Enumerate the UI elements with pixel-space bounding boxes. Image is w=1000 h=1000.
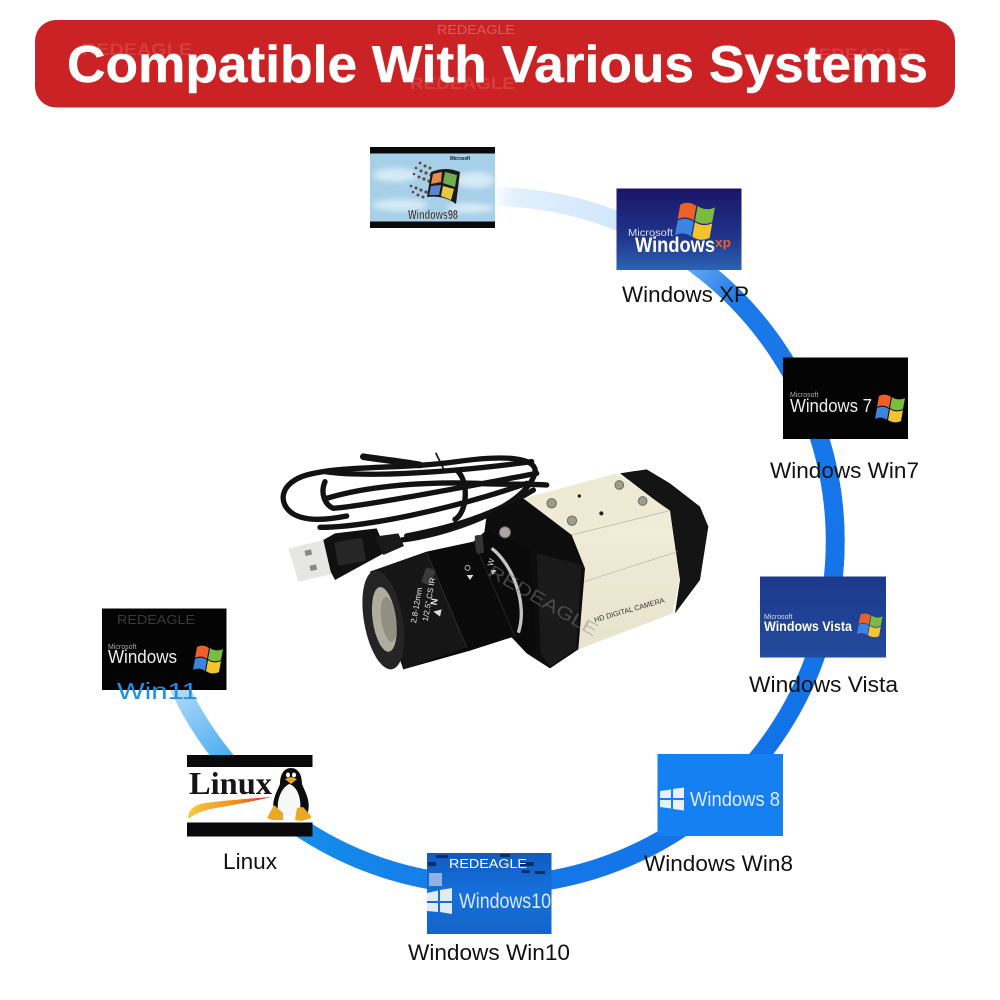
logo: Windows 7: [783, 358, 908, 439]
logo: Windows 98: [370, 147, 495, 228]
title banner: REDEAGLE: [805, 45, 910, 64]
logo: Linux: Linux: [189, 765, 272, 801]
label: Win11: Win11: [117, 678, 198, 704]
logo: Windows 10: Windows10: [459, 890, 551, 913]
logo: Windows 8: Windows 8: [690, 789, 780, 811]
label: Windows Win7: Windows Win7: [770, 458, 919, 483]
top screws: [547, 481, 647, 525]
lens: [356, 527, 537, 673]
title banner: REDEAGLE: [82, 40, 192, 59]
title banner: REDEAGLE: [437, 23, 515, 37]
label: Windows Win8: Windows Win8: [644, 851, 793, 876]
connecting ring: [137, 187, 845, 895]
logo: Windows 11: REDEAGLE: [117, 612, 195, 627]
logo: Windows 7: Windows 7: [790, 396, 872, 416]
label: Windows Win10: Windows Win10: [408, 940, 570, 965]
title banner: REDEAGLE: [410, 74, 515, 93]
logo: Windows 8: [658, 754, 783, 836]
title text: Compatible With Various Systems: [67, 36, 928, 94]
camera side face: [572, 511, 679, 649]
logo: Windows 10: REDEAGLE: [449, 856, 527, 871]
product photo: USB camera with cable: [283, 453, 708, 673]
camera label: HD DIGITAL CAMERA: [593, 596, 665, 624]
logo: Windows XP: Windows: [635, 234, 715, 257]
USB cable coils: [283, 453, 547, 540]
logo: Windows 7: Microsoft: [790, 392, 818, 399]
logo: Windows 98: Microsoft: [450, 156, 470, 162]
logo: Windows 98: Windows98: [408, 207, 458, 222]
logo: Windows 11: Windows: [108, 647, 177, 667]
label: Windows XP: Windows XP: [622, 282, 749, 307]
camera front block: [483, 498, 585, 668]
logo: Linux: [187, 755, 312, 836]
lens: 2.8-12mm: [409, 586, 424, 624]
camera rear cap: [620, 469, 708, 613]
logo: Windows 11: Microsoft: [108, 644, 136, 651]
lens: 1/2.5" CS IR: [421, 577, 437, 622]
logo: Windows Vista: Windows Vista: [764, 618, 852, 634]
logo: Windows Vista: [760, 576, 886, 658]
logo: Windows XP: xp: [715, 235, 731, 250]
label: Windows Vista: Windows Vista: [749, 672, 899, 697]
logo: Windows 11: [102, 608, 226, 690]
camera top face: [523, 473, 670, 535]
lens: W: [486, 557, 497, 567]
logo: Windows XP: [616, 188, 742, 270]
logo: Windows XP: Microsoft: [628, 228, 673, 239]
logo: Windows 10: [427, 853, 552, 934]
logo: Windows Vista: Microsoft: [764, 614, 792, 621]
lens: N: [429, 597, 440, 606]
label: Linux: Linux: [223, 849, 277, 874]
USB plug: [288, 528, 404, 582]
title banner: [35, 20, 955, 108]
lens: O: [463, 564, 473, 572]
watermark: REDEAGLE: [485, 561, 601, 640]
icon: penguin: [267, 768, 311, 821]
